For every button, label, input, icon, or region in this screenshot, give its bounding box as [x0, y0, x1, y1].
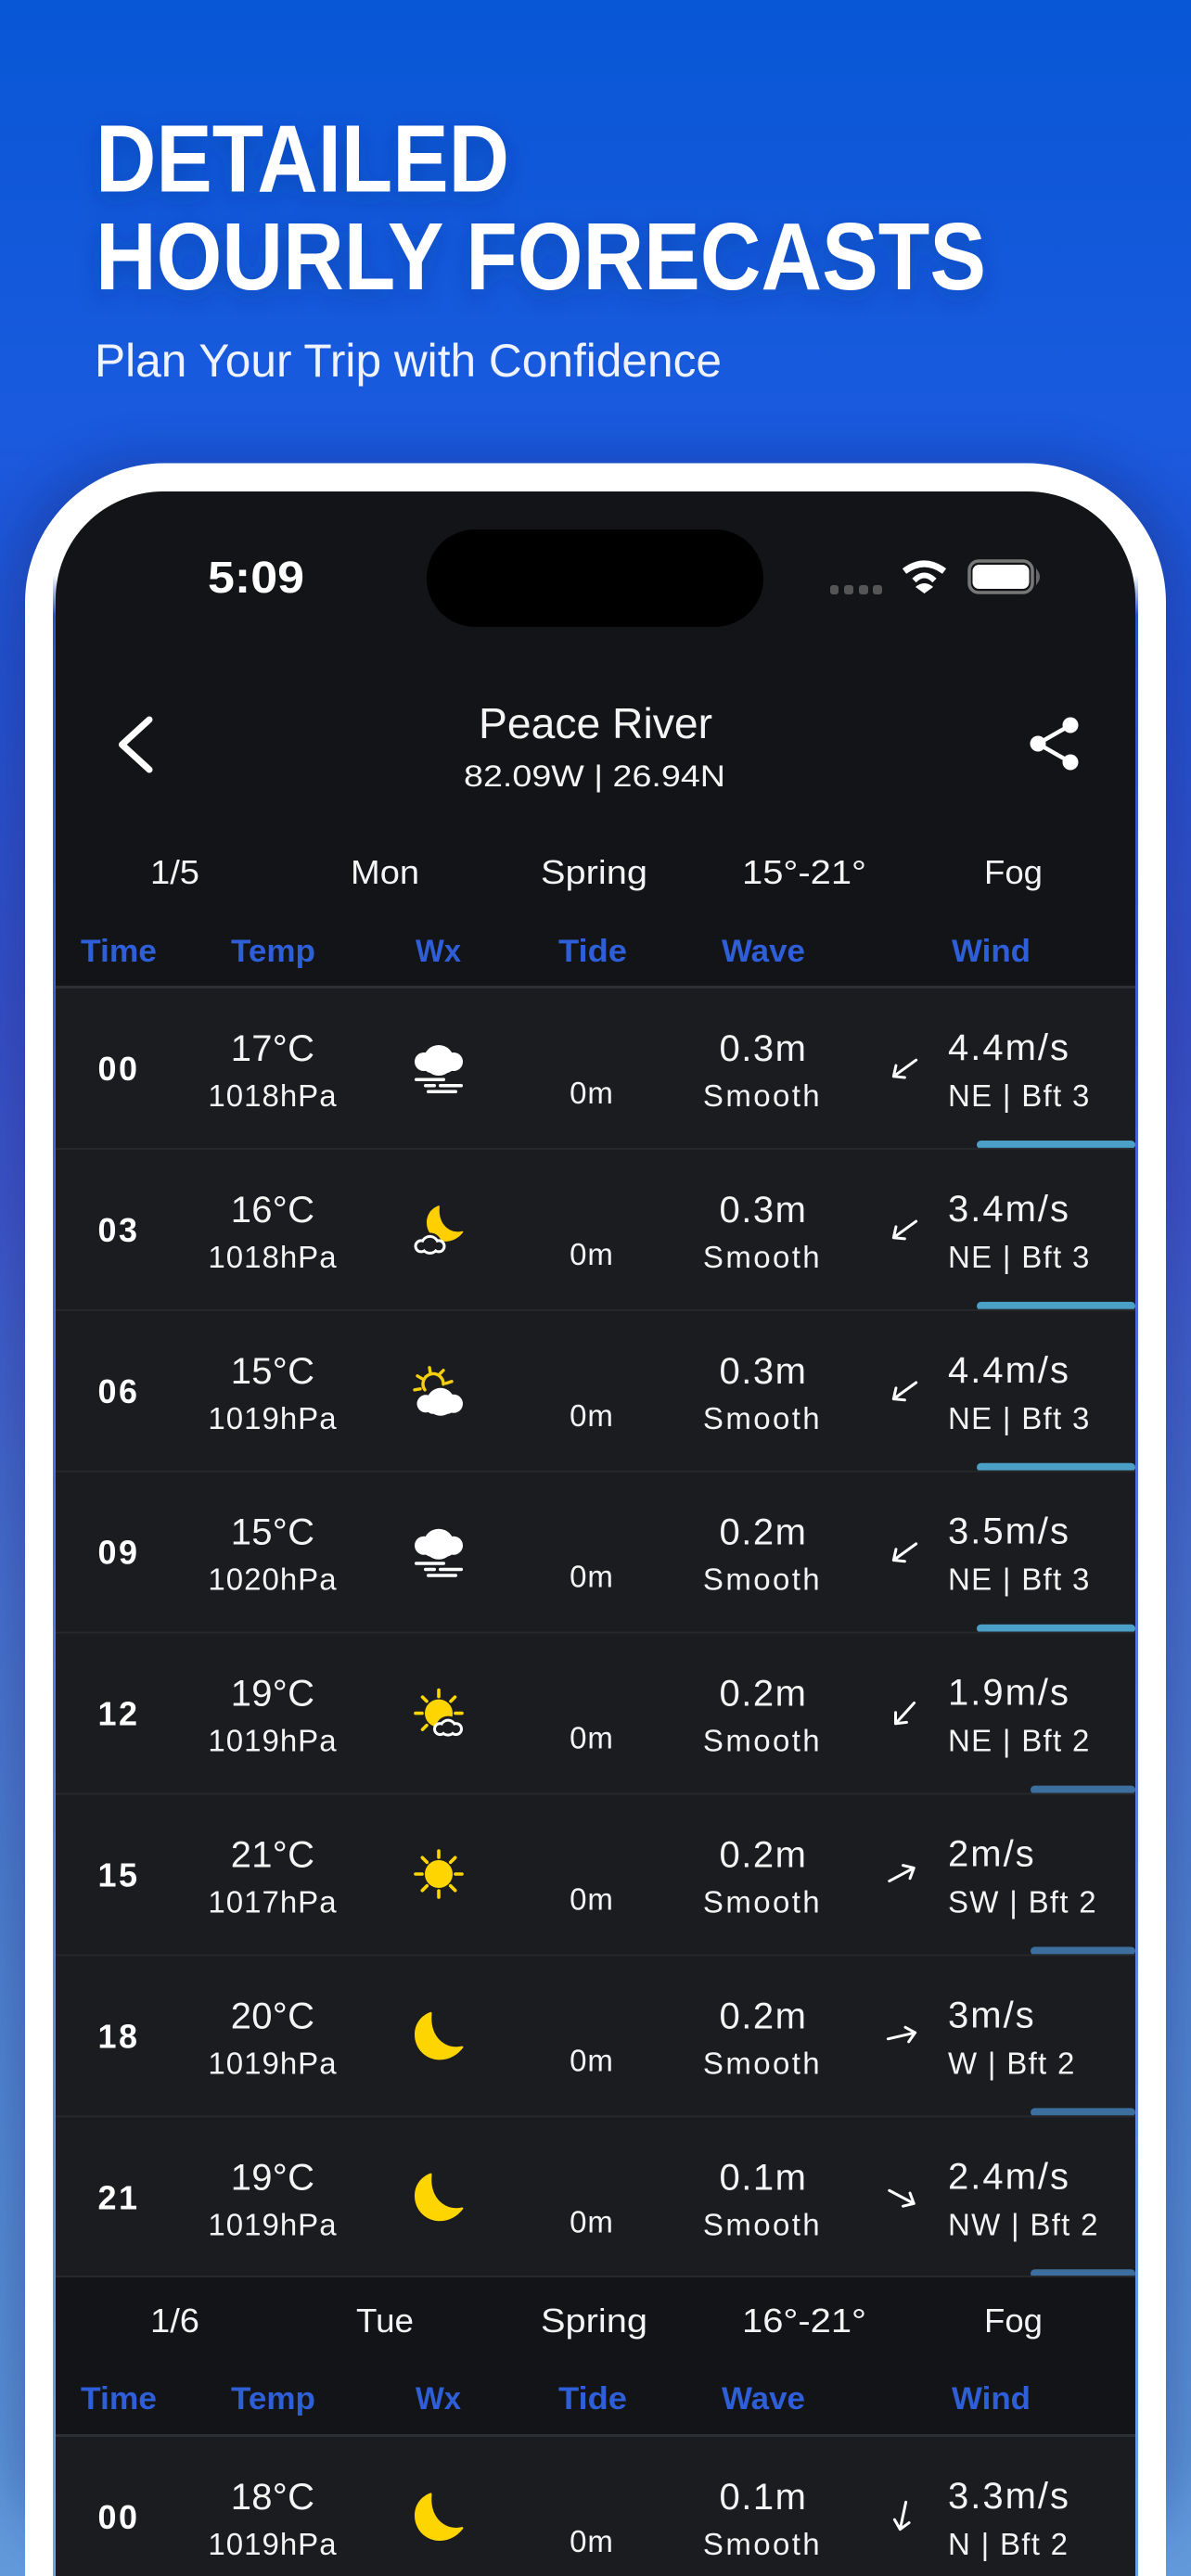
day summary: 1/6: 16°-21°: [742, 2302, 866, 2340]
day summary: 1/6: Tue: [356, 2302, 414, 2340]
row 12: 1019hPa: [208, 1724, 338, 1758]
row 12: 12: [97, 1695, 140, 1733]
row 00: 17°C: [231, 1028, 314, 1069]
row 18: [56, 1954, 1135, 2116]
row 15: 2m/s: [948, 1834, 1036, 1875]
arrow: wind N: [893, 2501, 913, 2531]
column headers: Temp: [231, 2381, 315, 2417]
day summary: 1/5: 15°-21°: [742, 853, 866, 891]
row 00 next day: N | Bft 2: [948, 2527, 1069, 2561]
row 12: NE | Bft 2: [948, 1724, 1091, 1758]
icon: moon: [415, 2493, 464, 2541]
row 00 next day: 3.3m/s: [948, 2476, 1070, 2517]
row 18: 0m: [570, 2043, 614, 2077]
row 15: 0m: [570, 1882, 614, 1916]
day summary: 1/6: 1/6: [150, 2302, 199, 2340]
row 18: 0.2m: [720, 1996, 807, 2036]
arrow: wind NW: [886, 2184, 917, 2210]
title: HOURLY FORECASTS: [96, 203, 986, 310]
day summary: 1/6: Fog: [984, 2302, 1043, 2340]
row 21: NW | Bft 2: [948, 2207, 1099, 2241]
row 00: Smooth: [703, 1078, 822, 1113]
row 00: NE | Bft 3: [948, 1078, 1091, 1113]
row 09: 0m: [570, 1560, 614, 1594]
row 09: 3.5m/s: [948, 1511, 1070, 1552]
phone white frame: [25, 464, 1166, 2576]
title: [96, 106, 986, 310]
signal dots: [830, 585, 882, 594]
column headers: Tide: [558, 934, 627, 969]
row 09: Smooth: [703, 1562, 822, 1597]
column headers: Wx: [416, 934, 461, 969]
row 12: 0m: [570, 1721, 614, 1755]
row 21: 0m: [570, 2204, 614, 2238]
column headers: [81, 934, 1031, 969]
row 18: 18: [97, 2017, 140, 2055]
status bar: [208, 529, 1039, 627]
row 21: 0.1m: [720, 2157, 807, 2198]
dynamic island: [427, 529, 763, 627]
row 09: 1020hPa: [208, 1562, 338, 1597]
row 00 next day: 1019hPa: [208, 2527, 338, 2561]
column headers: Time: [81, 2381, 157, 2417]
row 15: 15: [97, 1856, 140, 1894]
row 21: 1019hPa: [208, 2207, 338, 2241]
day summary: 1/5: Fog: [984, 853, 1043, 891]
row 21: 21: [97, 2178, 140, 2216]
row 06: Smooth: [703, 1401, 822, 1435]
row 18: Smooth: [703, 2046, 822, 2080]
icon: battery: [969, 561, 1039, 593]
row 03: 3.4m/s: [948, 1189, 1070, 1230]
row 18: W | Bft 2: [948, 2046, 1076, 2080]
coordinates: 82.09W | 26.94N: [464, 759, 725, 793]
row 00 next day: 00: [97, 2498, 140, 2536]
icon: moon: [415, 2174, 464, 2221]
phone screen: [56, 491, 1135, 2576]
nav header: [122, 699, 1078, 793]
day summary: 1/6: Spring: [541, 2302, 647, 2340]
column headers: Wx: [416, 2381, 461, 2417]
row 00 next day: [56, 2434, 1135, 2576]
column headers: Tide: [558, 2381, 627, 2417]
column headers: Wave: [722, 2381, 805, 2417]
row 21: [56, 2115, 1135, 2277]
day summary: 1/5: Mon: [351, 853, 419, 891]
icon: sun and cloud: [416, 1690, 463, 1741]
icon: wifi: [904, 564, 944, 593]
row 03: [56, 1148, 1135, 1310]
row 06: 15°C: [231, 1351, 314, 1392]
row 03: 1018hPa: [208, 1240, 338, 1274]
icon: sun: [416, 1851, 462, 1897]
row 12: 19°C: [231, 1674, 314, 1715]
row 09: [56, 1471, 1135, 1633]
row 03: Smooth: [703, 1240, 822, 1274]
column headers: [81, 2381, 1031, 2417]
title: DETAILED: [96, 106, 509, 211]
row 03: 03: [97, 1211, 140, 1249]
row 09: NE | Bft 3: [948, 1562, 1091, 1597]
row 15: SW | Bft 2: [948, 1884, 1097, 1919]
icon: fog: [415, 1045, 463, 1093]
row 18: 20°C: [231, 1996, 314, 2036]
icon: night cloud: [414, 1205, 463, 1256]
arrow: wind W: [887, 2025, 916, 2047]
row 00: 00: [97, 1050, 140, 1088]
row 15: 0.2m: [720, 1834, 807, 1875]
column headers: Wave: [722, 934, 805, 969]
row 00 next day: Smooth: [703, 2527, 822, 2561]
row 15: [56, 1793, 1135, 1955]
day summary: 1/5: Spring: [541, 853, 647, 891]
row 06: 4.4m/s: [948, 1350, 1070, 1391]
row 06: 1019hPa: [208, 1401, 338, 1435]
column headers: Wind: [952, 2381, 1031, 2417]
row 03: 0m: [570, 1237, 614, 1271]
row 03: NE | Bft 3: [948, 1240, 1091, 1274]
row 12: Smooth: [703, 1724, 822, 1758]
row 15: 1017hPa: [208, 1884, 338, 1919]
day summary: 1/5: [150, 853, 1043, 891]
row 15: Smooth: [703, 1884, 822, 1919]
clock: 5:09: [208, 554, 304, 603]
row 09: 0.2m: [720, 1512, 807, 1553]
row 00 next day: 0.1m: [720, 2477, 807, 2518]
row 21: 19°C: [231, 2157, 314, 2198]
arrow: wind SW: [886, 1861, 917, 1888]
arrow: wind NE: [890, 1054, 920, 1082]
row 00: 1018hPa: [208, 1078, 338, 1113]
icon: moon: [415, 2012, 464, 2060]
phone inner blue edges: [53, 575, 1138, 2576]
row 03: 16°C: [231, 1190, 314, 1231]
arrow: wind NE: [890, 1377, 920, 1405]
day summary: 1/6: [56, 2276, 1135, 2435]
subtitle: Plan Your Trip with Confidence: [95, 335, 722, 387]
row 00 next day: 18°C: [231, 2477, 314, 2518]
row 18: 3m/s: [948, 1995, 1036, 2035]
row 09: 09: [97, 1534, 140, 1572]
row 00: [56, 986, 1135, 1149]
icon: fog: [415, 1529, 463, 1577]
icon: share: [1030, 718, 1078, 770]
icon: back chevron: [122, 720, 149, 770]
arrow: wind NE: [890, 1216, 920, 1243]
column headers: Time: [81, 934, 157, 969]
phone mockup: [25, 464, 1166, 2576]
arrow: wind NE: [890, 1537, 920, 1566]
column headers: Temp: [231, 934, 315, 969]
row 21: Smooth: [703, 2207, 822, 2241]
row 18: 1019hPa: [208, 2046, 338, 2080]
row 06: [56, 1309, 1135, 1472]
icon: partly cloudy: [415, 1368, 463, 1416]
place name: Peace River: [479, 699, 712, 747]
arrow: wind NE: [890, 1698, 919, 1728]
row 06: 0.3m: [720, 1351, 807, 1392]
row 12: 1.9m/s: [948, 1673, 1070, 1714]
row 03: 0.3m: [720, 1190, 807, 1231]
row 00: 0m: [570, 1076, 614, 1110]
row 06: 06: [97, 1372, 140, 1410]
row 12: [56, 1632, 1135, 1794]
row 12: 0.2m: [720, 1674, 807, 1715]
row 00: 4.4m/s: [948, 1027, 1070, 1068]
row 06: 0m: [570, 1398, 614, 1433]
column headers: Wind: [952, 934, 1031, 969]
row 15: 21°C: [231, 1834, 314, 1875]
row 21: 2.4m/s: [948, 2156, 1070, 2197]
row 00: 0.3m: [720, 1028, 807, 1069]
row 00 next day: 0m: [570, 2524, 614, 2558]
day summary: 1/5: 1/5: [150, 853, 199, 891]
row 09: 15°C: [231, 1512, 314, 1553]
row 06: NE | Bft 3: [948, 1401, 1091, 1435]
